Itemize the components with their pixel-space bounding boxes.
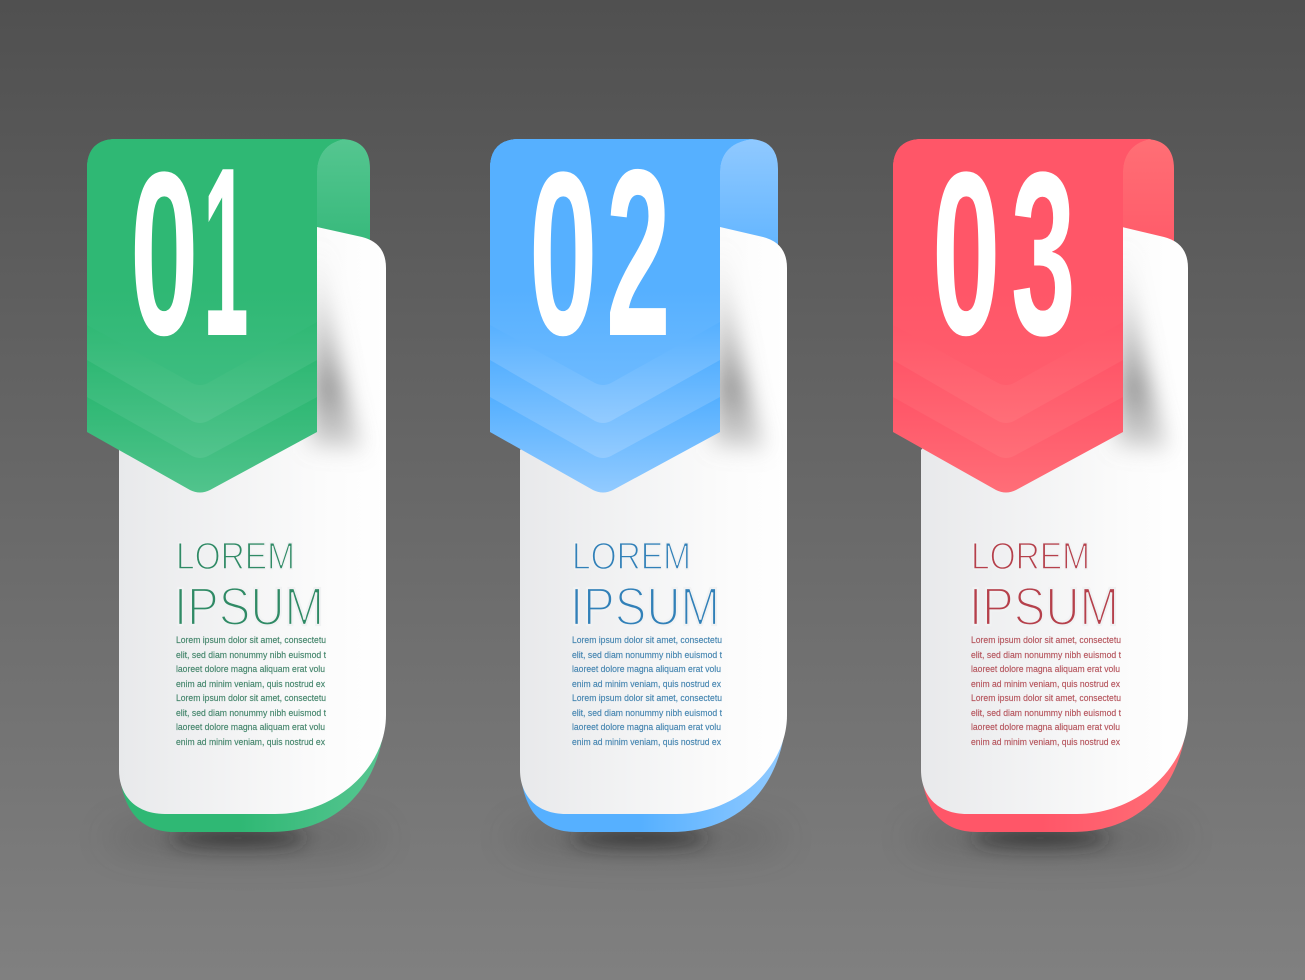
white card 01 bbox=[119, 227, 386, 814]
ribbon tag 03 bbox=[893, 139, 1151, 492]
body text 02: elit, sed diam nonummy nibh euismod t bbox=[572, 708, 722, 719]
body text 03: laoreet dolore magna aliquam erat volu bbox=[971, 664, 1120, 675]
card base edge 03 bbox=[921, 600, 1188, 832]
body text 01: laoreet dolore magna aliquam erat volu bbox=[176, 664, 325, 675]
body text 01: enim ad minim veniam, quis nostrud ex bbox=[176, 679, 325, 690]
floor shadow 01 bbox=[105, 822, 385, 854]
body text 03: elit, sed diam nonummy nibh euismod t bbox=[971, 708, 1121, 719]
heading 03: LOREM bbox=[971, 536, 1090, 578]
fold back 02 bbox=[703, 139, 778, 250]
body text 02 bbox=[572, 635, 722, 748]
number 01 bbox=[130, 118, 249, 387]
number 03 bbox=[932, 124, 1076, 385]
body text 01: Lorem ipsum dolor sit amet, consectetu bbox=[176, 693, 326, 704]
body text 02: enim ad minim veniam, quis nostrud ex bbox=[572, 679, 721, 690]
body text 03: enim ad minim veniam, quis nostrud ex bbox=[971, 679, 1120, 690]
body text 02: Lorem ipsum dolor sit amet, consectetu bbox=[572, 635, 722, 646]
heading 03 bbox=[969, 536, 1119, 637]
card base edge 01 bbox=[119, 600, 386, 832]
number 03: 3 bbox=[1011, 124, 1076, 385]
panel: card 01 bbox=[87, 118, 386, 854]
fold back 01 bbox=[300, 139, 370, 250]
body text 01 bbox=[176, 635, 326, 748]
body text 03: enim ad minim veniam, quis nostrud ex bbox=[971, 737, 1120, 748]
fold back 03 bbox=[1105, 139, 1174, 250]
body text 01: enim ad minim veniam, quis nostrud ex bbox=[176, 737, 325, 748]
heading 03: IPSUM bbox=[969, 577, 1119, 637]
body text 03: elit, sed diam nonummy nibh euismod t bbox=[971, 650, 1121, 661]
number 01: 1 bbox=[203, 118, 249, 387]
fold shadow 02 bbox=[713, 245, 765, 450]
heading 01: IPSUM bbox=[174, 577, 324, 637]
number 02: 2 bbox=[606, 120, 671, 386]
body text 03 bbox=[971, 635, 1121, 748]
ribbon tag 01 bbox=[87, 139, 345, 492]
body text 03: Lorem ipsum dolor sit amet, consectetu bbox=[971, 635, 1121, 646]
body text 02: enim ad minim veniam, quis nostrud ex bbox=[572, 737, 721, 748]
white card 02 bbox=[520, 227, 787, 814]
number 02 bbox=[529, 120, 671, 386]
panel: card 03 bbox=[893, 124, 1188, 854]
number 01: 0 bbox=[130, 124, 198, 384]
body text 02: laoreet dolore magna aliquam erat volu bbox=[572, 722, 721, 733]
body text 02: elit, sed diam nonummy nibh euismod t bbox=[572, 650, 722, 661]
panel: card 02 bbox=[490, 120, 787, 854]
heading 01 bbox=[174, 536, 324, 637]
body text 03: Lorem ipsum dolor sit amet, consectetu bbox=[971, 693, 1121, 704]
fold shadow 01 bbox=[310, 245, 362, 450]
body text 02: Lorem ipsum dolor sit amet, consectetu bbox=[572, 693, 722, 704]
ribbon tag 02 bbox=[490, 139, 753, 492]
number 02: 0 bbox=[529, 124, 597, 384]
heading 01: LOREM bbox=[176, 536, 295, 578]
floor shadow 02 bbox=[506, 822, 786, 854]
body text 01: laoreet dolore magna aliquam erat volu bbox=[176, 722, 325, 733]
white card 03 bbox=[921, 227, 1188, 814]
heading 02: LOREM bbox=[572, 536, 691, 578]
body text 01: elit, sed diam nonummy nibh euismod t bbox=[176, 708, 326, 719]
floor shadow 03 bbox=[907, 822, 1187, 854]
heading 02: IPSUM bbox=[570, 577, 720, 637]
body text 03: laoreet dolore magna aliquam erat volu bbox=[971, 722, 1120, 733]
body text 01: Lorem ipsum dolor sit amet, consectetu bbox=[176, 635, 326, 646]
card base edge 02 bbox=[520, 600, 787, 832]
body text 01: elit, sed diam nonummy nibh euismod t bbox=[176, 650, 326, 661]
fold shadow 03 bbox=[1116, 245, 1168, 450]
number 03: 0 bbox=[932, 124, 1000, 384]
body text 02: laoreet dolore magna aliquam erat volu bbox=[572, 664, 721, 675]
heading 02 bbox=[570, 536, 720, 637]
